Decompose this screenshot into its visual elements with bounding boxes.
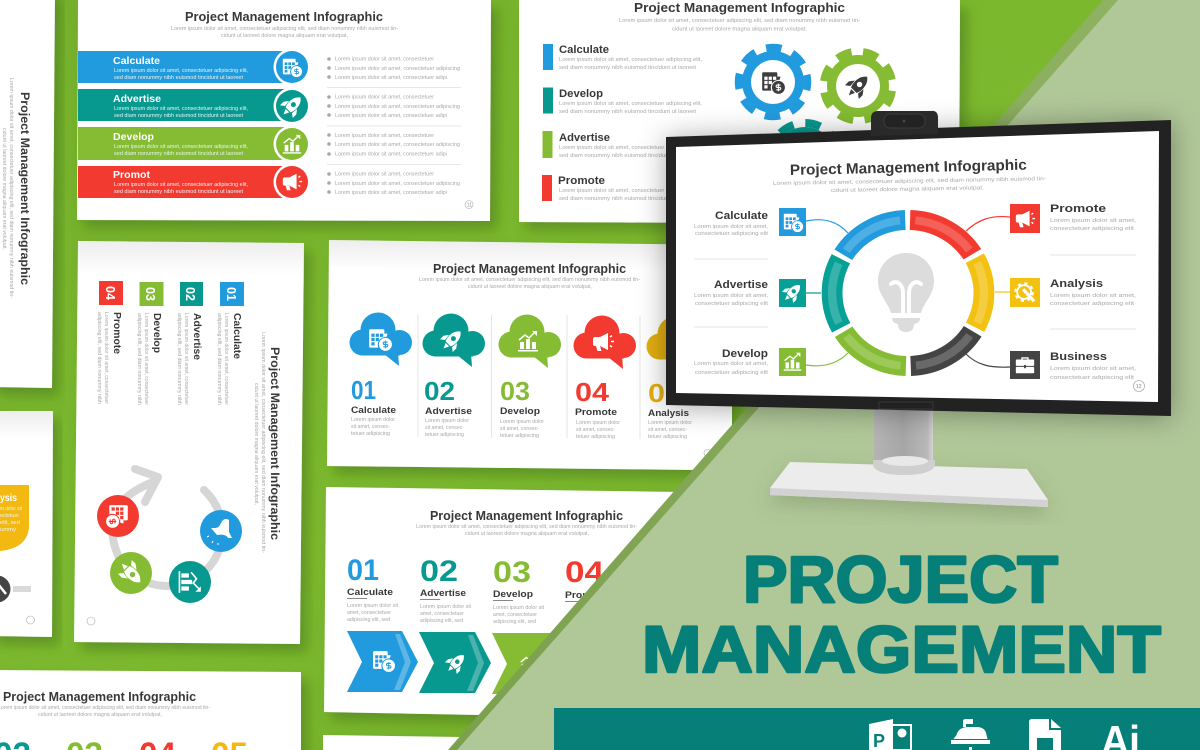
item: Calculate: consectetuer adipiscing elit (695, 231, 769, 237)
card 02 Advertise: tetuer adipiscing (425, 432, 464, 438)
item 02 Advertise: Lorem ipsum dolor sit amet, consectetuer (183, 313, 189, 405)
card 04 Promote (574, 316, 636, 440)
item: Develop: Lorem ipsum dolor sit amet, (694, 361, 768, 367)
bullet lists: Lorem ipsum dolor sit amet, consectetuer (335, 133, 434, 139)
card 03 Develop (498, 314, 561, 439)
item: Develop: consectetuer adipiscing elit (695, 370, 769, 376)
intro text: Lorem ipsum dolor sit amet, consectetuer adipiscing elit, sed diam nonummy nibh euismod tin- (419, 277, 640, 283)
row: Advertise: sed diam nonummy nibh euismod tincidunt ut laoreet (114, 113, 244, 119)
card 04 Promote: Promote (575, 407, 617, 418)
item: Calculate: Calculate (559, 44, 609, 56)
row: Calculate: Lorem ipsum dolor sit amet, consectetuer adipiscing elit, (114, 68, 248, 74)
item 01 Calculate (216, 282, 244, 405)
intro text (171, 26, 398, 39)
step 03 Develop (492, 556, 566, 694)
card 03 Develop: tetuer adipiscing (500, 433, 539, 439)
item: Advertise: Advertise (559, 132, 610, 144)
step 04 Promote (565, 556, 607, 602)
diagonal strip (448, 0, 1118, 750)
item: Advertise: sed diam nonummy nibh euismod tincidunt ut laoreet (559, 153, 697, 159)
item: Advertise (542, 131, 702, 159)
page number: 11 (467, 202, 472, 208)
item: Advertise (694, 279, 806, 307)
slide: clouds (327, 240, 732, 470)
yellow shield: elit, sed (0, 520, 20, 526)
intro text: cidunt ut laoreet dolore magna aliquam erat volutpat. (672, 26, 807, 32)
main title: MANAGEMENT (642, 612, 1161, 686)
page number (465, 200, 473, 208)
row: Advertise: Advertise (113, 93, 161, 105)
monitor stand (770, 410, 1048, 507)
card 01 Calculate: Lorem ipsum dolor (351, 417, 395, 423)
circle: chart (169, 561, 211, 603)
item: Calculate (543, 44, 702, 71)
slide: horizontal list (77, 0, 491, 221)
item 04 Promote: Lorem ipsum dolor sit amet, consectetuer (103, 312, 109, 404)
card 01 Calculate: 01 (351, 375, 376, 405)
intro text: cidunt ut laoreet dolore magna aliquam erat volutpat, (468, 284, 592, 290)
item 04 Promote (96, 281, 123, 404)
item 03 Develop: Lorem ipsum dolor sit amet, consectetuer (143, 313, 149, 405)
item: Business (1010, 351, 1136, 381)
bullet lists: Lorem ipsum dolor sit amet, consectetuer adipiscing (335, 142, 460, 148)
heading: Project Management Infographic (3, 690, 196, 704)
step 02 Advertise: 02 (420, 555, 458, 588)
step 02 Advertise: amet, consectetuer (420, 611, 464, 617)
step 01 Calculate: amet, consectetuer (347, 610, 391, 616)
bullet lists: Lorem ipsum dolor sit amet, consectetuer adipiscing (335, 66, 460, 72)
yellow shield: ummy (0, 527, 17, 533)
intro text: cidunt ut laoreet dolore magna aliquam erat volutpat, (38, 712, 162, 718)
card 01 Calculate: sit amet, consec- (351, 424, 390, 430)
item: Calculate (694, 208, 806, 237)
item 01 Calculate: Calculate (231, 313, 242, 359)
stand neck (873, 410, 935, 475)
bullet lists: Lorem ipsum dolor sit amet, consectetuer adipi (335, 190, 447, 196)
item: Analysis: Lorem ipsum dolor sit amet, (1050, 293, 1136, 299)
step 03 Develop: Lorem ipsum dolor sit (493, 605, 545, 611)
step 01 Calculate (347, 554, 418, 692)
slide: gears (519, 0, 960, 224)
dark circle and bar (0, 576, 31, 602)
light bulb (878, 253, 934, 332)
step 02 Advertise: Lorem ipsum dolor sit (420, 604, 472, 610)
screen page number (1134, 380, 1144, 392)
bullet lists: Lorem ipsum dolor sit amet, consectetuer (335, 56, 434, 62)
step 01 Calculate: Calculate (347, 587, 393, 598)
step 01 Calculate: 01 (347, 554, 379, 587)
screen (676, 131, 1159, 402)
intro text (0, 705, 210, 718)
row: Develop: sed diam nonummy nibh euismod tincidunt ut laoreet (114, 151, 244, 157)
main title: PROJECT (743, 542, 1058, 616)
page number (87, 617, 95, 625)
item: Promote: Lorem ipsum dolor sit amet, consectetuer adipiscing elit, (559, 188, 702, 194)
item: Calculate: Lorem ipsum dolor sit amet, (694, 224, 768, 230)
item: Calculate: Calculate (715, 210, 768, 222)
item: Business: consectetuer adipiscing elit (1050, 375, 1135, 381)
heading: Project Management Infographic (268, 347, 282, 540)
intro text (419, 277, 640, 290)
item: Analysis: Analysis (1050, 278, 1103, 290)
row: Develop: Lorem ipsum dolor sit amet, consectetuer adipiscing elit, (114, 144, 248, 150)
heading: Project Management Infographic (185, 9, 383, 24)
item: Promote: Promote (558, 175, 605, 187)
item 02 Advertise: adipiscing elit, sed diam nonummy nibh (176, 313, 182, 405)
intro text (253, 332, 266, 553)
monitor (666, 111, 1171, 416)
intro text (416, 524, 637, 537)
webcam (871, 111, 938, 136)
card 04 Promote: Lorem ipsum dolor (576, 420, 620, 426)
bullet lists: Lorem ipsum dolor sit amet, consectetuer adipiscing (335, 104, 460, 110)
intro text: cidunt ut laoreet dolore magna aliquam erat volutpat, (253, 383, 259, 505)
bullet lists: Lorem ipsum dolor sit amet, consectetuer adipiscing (335, 181, 460, 187)
yellow shield: ysis (0, 493, 17, 504)
item: Calculate: sed diam nonummy nibh euismod tincidunt ut laoreet (559, 65, 697, 71)
card 01 Calculate (350, 312, 412, 437)
item 04 Promote: Promote (111, 312, 122, 354)
screen intro (773, 176, 1046, 194)
row: Calculate: sed diam nonummy nibh euismod tincidunt ut laoreet (114, 75, 244, 81)
item: Develop (694, 348, 806, 376)
item 03 Develop: adipiscing elit, sed diam nonummy nibh (136, 313, 142, 405)
monitor frame (666, 120, 1171, 416)
step 02 Advertise: Advertise (420, 588, 466, 599)
card 04 Promote: tetuer adipiscing (576, 434, 615, 440)
heading: Project Management Infographic (433, 262, 626, 276)
intro text (619, 18, 860, 32)
gear: green (819, 47, 897, 125)
card 05 Analysis: Lorem ipsum dolor (648, 420, 692, 426)
card 02 Advertise: Advertise (425, 406, 472, 417)
item 02 Advertise: 02 (183, 287, 198, 301)
card 05 Analysis: sit amet, consec- (648, 427, 687, 433)
intro text: Lorem ipsum dolor sit amet, consectetuer adipiscing elit, sed diam nonummy nibh euismod tin- (619, 18, 860, 24)
item: Promote (542, 175, 702, 202)
slide: bottom-left numbers (0, 670, 301, 750)
item: Business: Lorem ipsum dolor sit amet, (1050, 366, 1136, 372)
step 03 Develop: 03 (493, 556, 531, 589)
yellow shield: ectetuer (0, 513, 19, 519)
item: Develop: Develop (722, 348, 768, 360)
item 03 Develop: 03 (143, 287, 158, 301)
card 01 Calculate: tetuer adipiscing (351, 431, 390, 437)
gear: blue (732, 41, 814, 123)
card 05 Analysis (646, 316, 709, 440)
circle: calculator (97, 495, 139, 537)
item: Promote (1010, 203, 1136, 233)
item: Develop (543, 88, 702, 115)
card 05 Analysis: 05 (648, 378, 682, 408)
item: Analysis: consectetuer adipiscing elit (1050, 301, 1135, 307)
step 02 Advertise (419, 555, 491, 693)
item 03 Develop (136, 282, 164, 405)
intro text: Lorem ipsum dolor sit amet, consectetuer adipiscing elit, sed diam nonummy nibh euismod tin- (171, 26, 398, 32)
heading: Project Management Infographic (634, 0, 845, 15)
card 03 Develop: sit amet, consec- (500, 426, 539, 432)
row: Promot (78, 164, 310, 200)
power button (879, 402, 933, 409)
circle: rocket (110, 552, 152, 594)
item: Advertise: consectetuer adipiscing elit (695, 301, 769, 307)
item 02 Advertise (176, 282, 203, 405)
item 03 Develop: Develop (151, 313, 162, 353)
icon: Keynote (951, 719, 990, 750)
item: Develop: sed diam nonummy nibh euismod tincidunt ut laoreet (559, 109, 697, 115)
item: Business: Business (1050, 351, 1107, 363)
intro text: Lorem ipsum dolor sit amet, consectetuer adipiscing elit, sed diam nonummy nibh euismod tin- (416, 524, 637, 530)
bullet lists (327, 56, 461, 196)
item 04 Promote: 04 (103, 286, 118, 301)
connector lines (806, 217, 1010, 367)
heading: Project Management Infographic (430, 509, 623, 523)
step 02 Advertise: adipiscing elit, sed (420, 618, 463, 624)
yellow shield: m dolor sit (0, 506, 23, 512)
icon: PowerPoint (869, 719, 911, 750)
item 01 Calculate: 01 (224, 287, 239, 301)
step 01 Calculate: adipiscing elit, sed (347, 617, 390, 623)
light green panel (457, 0, 1200, 750)
card 05 Analysis: Analysis (648, 408, 689, 419)
step 03 Develop: adipiscing elit, sed (493, 619, 536, 625)
row: Develop: Develop (113, 131, 154, 143)
page number (704, 450, 711, 456)
intro text: Lorem ipsum dolor sit amet, consectetuer adipiscing elit, sed diam nonummy nibh euismod tin- (8, 78, 14, 298)
stand base (770, 462, 1048, 507)
slide: chevrons (324, 487, 682, 715)
bullet lists: Lorem ipsum dolor sit amet, consectetuer (335, 172, 434, 178)
step 04 Promote: 04 (565, 556, 604, 589)
page number (26, 616, 34, 624)
bullet lists: Lorem ipsum dolor sit amet, consectetuer (335, 94, 434, 100)
item 01 Calculate: adipiscing elit, sed diam nonummy nibh (216, 313, 222, 405)
intro text: Lorem ipsum dolor sit amet, consectetuer adipiscing elit, sed diam nonummy nibh euismod tin- (0, 705, 210, 711)
item: Develop: Lorem ipsum dolor sit amet, consectetuer adipiscing elit, (559, 101, 702, 107)
yellow shield (0, 485, 29, 551)
card 02 Advertise: sit amet, consec- (425, 425, 464, 431)
intro text: Lorem ipsum dolor sit amet, consectetuer adipiscing elit, sed diam nonummy nibh euismod tin- (260, 332, 266, 553)
row: Promot: Promot (113, 169, 151, 181)
step 03 Develop: amet, consectetuer (493, 612, 537, 618)
numbers (0, 736, 248, 750)
screen intro: cidunt ut laoreet dolore magna aliquam erat volutpat. (831, 185, 985, 194)
item: Calculate: Lorem ipsum dolor sit amet, consectetuer adipiscing elit, (559, 57, 702, 63)
card 03 Develop: 03 (500, 376, 530, 406)
item: Promote: sed diam nonummy nibh euismod tincidunt ut laoreet (559, 196, 697, 202)
screen heading: Project Management Infographic (790, 157, 1027, 179)
row: Advertise: Lorem ipsum dolor sit amet, consectetuer adipiscing elit, (114, 106, 248, 112)
circle: bell (200, 510, 242, 552)
step 03 Develop: Develop (493, 589, 533, 600)
step 01 Calculate: Lorem ipsum dolor sit (347, 603, 399, 609)
icon: Google Slides file (1029, 719, 1061, 750)
slide: yellow shield partial (0, 411, 53, 637)
card 04 Promote: 04 (575, 377, 610, 407)
step 04 Promote: Promote (565, 590, 607, 601)
format band (554, 708, 1200, 750)
item 01 Calculate: Lorem ipsum dolor sit amet, consectetuer (223, 313, 229, 405)
item: Analysis (1010, 278, 1136, 307)
item: Promote: Promote (1050, 203, 1106, 215)
card 02 Advertise (422, 314, 485, 438)
slide: rotated arrow cycle (74, 241, 304, 644)
cycle arrow (112, 469, 222, 586)
intro text: cidunt ut laoreet dolore magna aliquam erat volutpat, (1, 128, 7, 250)
slide: rotated top-left (0, 0, 55, 388)
item 02 Advertise: Advertise (191, 313, 202, 360)
bullet lists: Lorem ipsum dolor sit amet, consectetuer adipi (335, 75, 447, 81)
intro text (1, 78, 14, 298)
intro text: cidunt ut laoreet dolore magna aliquam erat volutpat, (465, 531, 589, 537)
screen intro: Lorem ipsum dolor sit amet, consectetuer adipiscing elit, sed diam nonummy nibh euismod tin- (773, 176, 1046, 187)
card 03 Develop: Develop (500, 406, 540, 417)
item: Advertise: Advertise (714, 279, 768, 291)
row: Promot: Lorem ipsum dolor sit amet, consectetuer adipiscing elit, (114, 182, 248, 188)
item 04 Promote: adipiscing elit, sed diam nonummy nibh (96, 312, 102, 404)
main title (642, 542, 1161, 686)
item: Promote: consectetuer adipiscing elit (1050, 226, 1135, 232)
card 01 Calculate: Calculate (351, 405, 396, 416)
item: Advertise: Lorem ipsum dolor sit amet, (694, 293, 768, 299)
row: Promot: sed diam nonummy nibh euismod tincidunt ut laoreet (114, 189, 244, 195)
row: Advertise (78, 88, 310, 124)
item: Promote: Lorem ipsum dolor sit amet, (1050, 218, 1136, 224)
slide: bottom partial (323, 735, 461, 750)
bullet lists: Lorem ipsum dolor sit amet, consectetuer adipi (335, 152, 447, 158)
screen page number: 12 (1136, 384, 1142, 390)
intro text: cidunt ut laoreet dolore magna aliquam erat volutpat, (221, 33, 348, 39)
card 02 Advertise: Lorem ipsum dolor (425, 418, 469, 424)
gear: teal (770, 123, 840, 193)
donut ring (802, 191, 1014, 395)
bullet lists: Lorem ipsum dolor sit amet, consectetuer adipi (335, 113, 447, 119)
card 04 Promote: sit amet, consec- (576, 427, 615, 433)
card 03 Develop: Lorem ipsum dolor (500, 419, 544, 425)
row: Calculate (78, 48, 310, 86)
row: Develop (78, 126, 310, 162)
card 02 Advertise: 02 (424, 376, 455, 406)
heading: Project Management Infographic (18, 92, 32, 285)
card 05 Analysis: tetuer adipiscing (648, 434, 687, 440)
row: Calculate: Calculate (113, 55, 160, 67)
item: Develop: Develop (559, 88, 603, 100)
item: Advertise: Lorem ipsum dolor sit amet, consectetuer adipiscing elit, (559, 145, 702, 151)
